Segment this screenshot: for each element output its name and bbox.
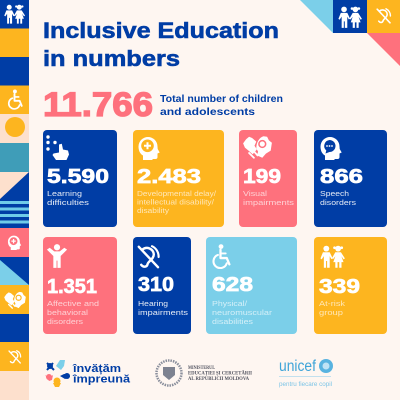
total number: 11.766 bbox=[43, 86, 153, 124]
card: speech disorders: disorders bbox=[320, 198, 356, 207]
card: affective and behavioral disorders: behavioral bbox=[47, 308, 88, 317]
logo: ministry: EDUCAȚIEI ȘI CERCETĂRII bbox=[188, 370, 252, 376]
card: developmental delay: Developmental delay/ bbox=[137, 189, 217, 198]
card: learning difficulties: Learning bbox=[47, 189, 82, 198]
card: developmental delay bbox=[133, 130, 224, 227]
logo: ministry: AL REPUBLICII MOLDOVA bbox=[188, 377, 249, 382]
card: learning difficulties: difficulties bbox=[47, 198, 89, 207]
card: physical disabilities: neuromuscular bbox=[212, 308, 273, 317]
title bbox=[43, 18, 279, 71]
card: visual impairments: Visual bbox=[243, 189, 267, 198]
card: visual impairments: impairments bbox=[243, 198, 294, 207]
card: affective and behavioral disorders: Affective and bbox=[47, 299, 99, 308]
card: affective and behavioral disorders: disorders bbox=[47, 317, 83, 326]
title: in numbers bbox=[43, 46, 180, 71]
card: physical disabilities: Physical/ bbox=[212, 299, 248, 308]
title: Inclusive Education bbox=[43, 18, 279, 43]
total description: and adolescents bbox=[160, 107, 256, 118]
card: developmental delay: intellectual disability/ bbox=[137, 198, 215, 206]
card: at-risk group bbox=[314, 237, 387, 334]
total description: Total number of children bbox=[160, 94, 283, 105]
card: at-risk group: 339 bbox=[319, 275, 360, 298]
card: affective and behavioral disorders: 1.351 bbox=[47, 275, 97, 298]
card: hearing impairments: impairments bbox=[138, 308, 188, 317]
logo: unicef: pentru fiecare copil bbox=[279, 381, 333, 388]
card: visual impairments bbox=[239, 130, 297, 227]
logo: unicef bbox=[279, 358, 333, 388]
logo: ministry bbox=[156, 360, 252, 386]
logo: invatam impreuna bbox=[45, 360, 131, 387]
card: developmental delay: 2.483 bbox=[137, 165, 201, 188]
card: speech disorders: Speech bbox=[320, 189, 349, 198]
card: hearing impairments: 310 bbox=[138, 273, 174, 296]
logo: unicef: unicef bbox=[279, 358, 317, 375]
card: developmental delay: disability bbox=[137, 206, 169, 215]
card: visual impairments: 199 bbox=[243, 165, 281, 188]
card: physical disabilities: 628 bbox=[212, 273, 253, 296]
card: hearing impairments: Hearing bbox=[138, 299, 168, 308]
card: physical disabilities: disabilities bbox=[212, 317, 253, 326]
logo: invatam impreuna: împreună bbox=[72, 374, 131, 386]
left decorative column bbox=[0, 0, 29, 400]
logo: ministry: MINISTERUL bbox=[188, 366, 216, 371]
top right decoration bbox=[300, 0, 400, 66]
card: hearing impairments bbox=[133, 237, 191, 334]
card: learning difficulties bbox=[43, 130, 117, 227]
card: physical disabilities bbox=[206, 237, 297, 334]
logo: invatam impreuna: învățăm bbox=[72, 363, 121, 375]
card: speech disorders bbox=[314, 130, 387, 227]
card: speech disorders: 866 bbox=[320, 165, 363, 188]
card: at-risk group: At-risk bbox=[319, 299, 345, 308]
card: learning difficulties: 5.590 bbox=[47, 165, 109, 188]
total description bbox=[160, 94, 283, 118]
card: at-risk group: group bbox=[319, 308, 343, 317]
card: affective and behavioral disorders bbox=[43, 237, 117, 334]
